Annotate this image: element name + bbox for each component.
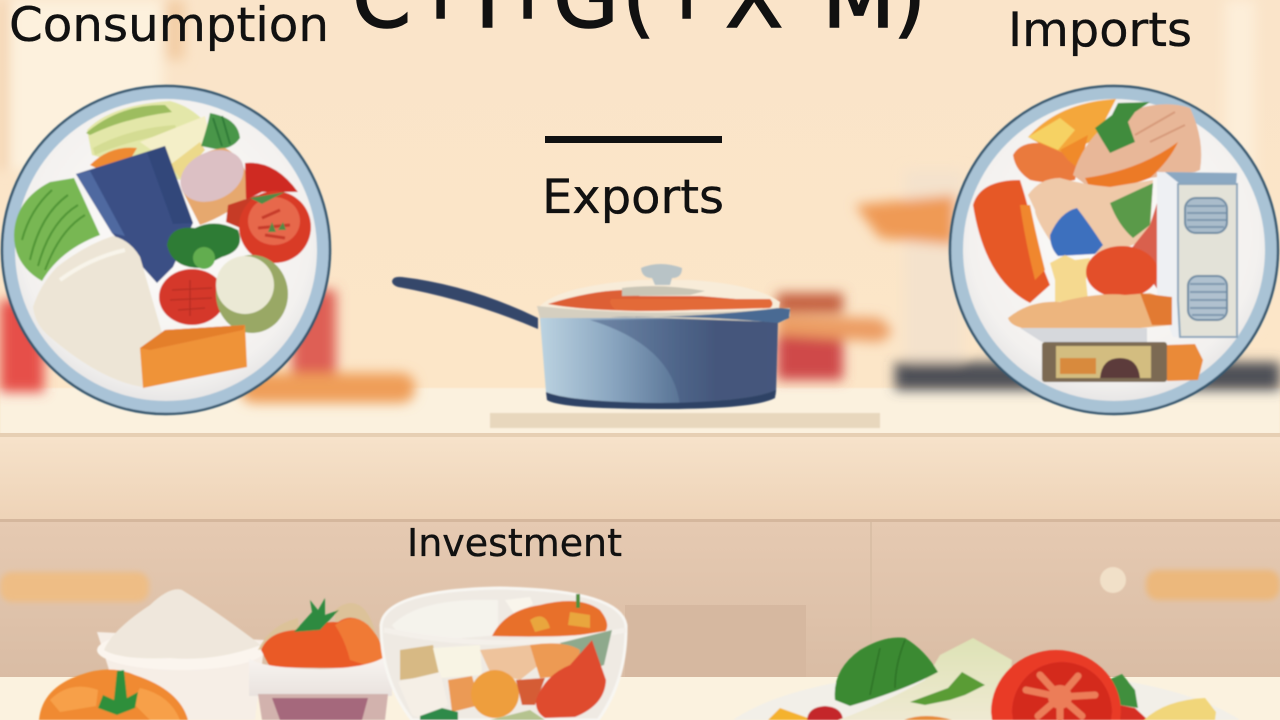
tomato right: [239, 191, 311, 263]
title formula cropped at top: [352, 0, 926, 48]
pale wedge: [838, 638, 1012, 720]
zucchini: [216, 255, 288, 333]
parsley herb: [1095, 102, 1150, 153]
red pepper: [973, 180, 1050, 303]
cream star: [1050, 255, 1090, 302]
top vent: [1185, 198, 1227, 233]
flour mound: [104, 589, 261, 659]
white cheese wedge: [33, 236, 162, 387]
green leaf: [201, 113, 240, 149]
basil leaf: [835, 638, 938, 706]
counter front: [0, 437, 1280, 520]
carrot: [1013, 143, 1080, 182]
cup: [249, 650, 392, 696]
flour bowl: [97, 632, 265, 720]
pan handle: [392, 277, 538, 329]
appliance box: [1157, 172, 1237, 337]
herbs: [910, 672, 985, 705]
orange wedge: [1085, 142, 1178, 188]
lid knob: [641, 264, 682, 285]
roast meat: [1073, 104, 1201, 188]
center meat: [1028, 178, 1153, 255]
label: Investment: Investment: [407, 521, 622, 565]
icon: imports plate: [950, 86, 1278, 414]
orange center bit: [904, 716, 952, 720]
yellow squash: [1028, 99, 1116, 155]
countertop: [0, 388, 1280, 434]
pan rim: [537, 306, 790, 322]
icon: saucepan: [392, 264, 790, 409]
beige behind tomato: [258, 603, 376, 650]
cabinet knob: [1100, 567, 1126, 593]
rice: [392, 600, 498, 640]
green wedge: [1110, 183, 1153, 238]
bowl rim line: [384, 630, 626, 642]
red tomato behind: [245, 163, 298, 200]
broccoli: [167, 223, 240, 268]
blue food piece: [1050, 208, 1103, 256]
blue box: [76, 146, 193, 283]
broccoli bit: [1108, 674, 1138, 708]
bowl contents: [400, 645, 440, 680]
label: Imports: Imports: [1008, 3, 1192, 58]
label: Exports: Exports: [542, 170, 724, 225]
tomato leaves: [294, 598, 339, 632]
curry: [492, 601, 607, 637]
glass bowl: [381, 588, 626, 720]
blurred kitchen objects: [0, 0, 1280, 403]
lid: [540, 280, 780, 314]
red pepper: [536, 640, 606, 718]
right shelf handle: [1146, 570, 1280, 600]
pan base: [546, 390, 776, 409]
serving plate: [733, 668, 1240, 720]
red slice: [1130, 200, 1160, 293]
lettuce stalks: [87, 101, 205, 180]
bread: [1008, 293, 1172, 328]
investment food: pumpkin, flour, cup, glass bowl: [39, 588, 626, 720]
bottom leaf: [420, 708, 458, 720]
lower cabinets: [0, 520, 1280, 680]
orange cheese: [140, 325, 247, 388]
pan body: [540, 318, 778, 408]
yellow slice right: [1144, 698, 1216, 720]
cup glass base: [258, 694, 388, 720]
bottom vent: [1188, 276, 1227, 320]
pumpkin stem: [98, 670, 138, 715]
tray: [1020, 328, 1147, 342]
plate rim: [2, 86, 330, 414]
icon: consumption plate: [2, 86, 330, 414]
tomato in cup: [261, 618, 384, 668]
fraction divider bar: [545, 136, 722, 143]
device: [1042, 342, 1167, 382]
orange piece: [1167, 344, 1203, 381]
peach ball: [471, 670, 519, 718]
left shelf handle: [0, 572, 149, 602]
lettuce left: [14, 178, 100, 281]
tomato bottom: [159, 269, 225, 325]
tomato slice: [991, 650, 1121, 720]
ham slice: [182, 148, 250, 225]
pumpkin: [39, 670, 188, 720]
red sauce: [807, 706, 843, 720]
bottom counter: [0, 677, 1280, 720]
plate of food, bottom right: [733, 638, 1240, 720]
carrot: [90, 148, 137, 170]
red round: [1086, 246, 1158, 298]
plate rim: [950, 86, 1278, 414]
red wedge: [1118, 705, 1148, 720]
yellow slices left: [768, 708, 808, 720]
